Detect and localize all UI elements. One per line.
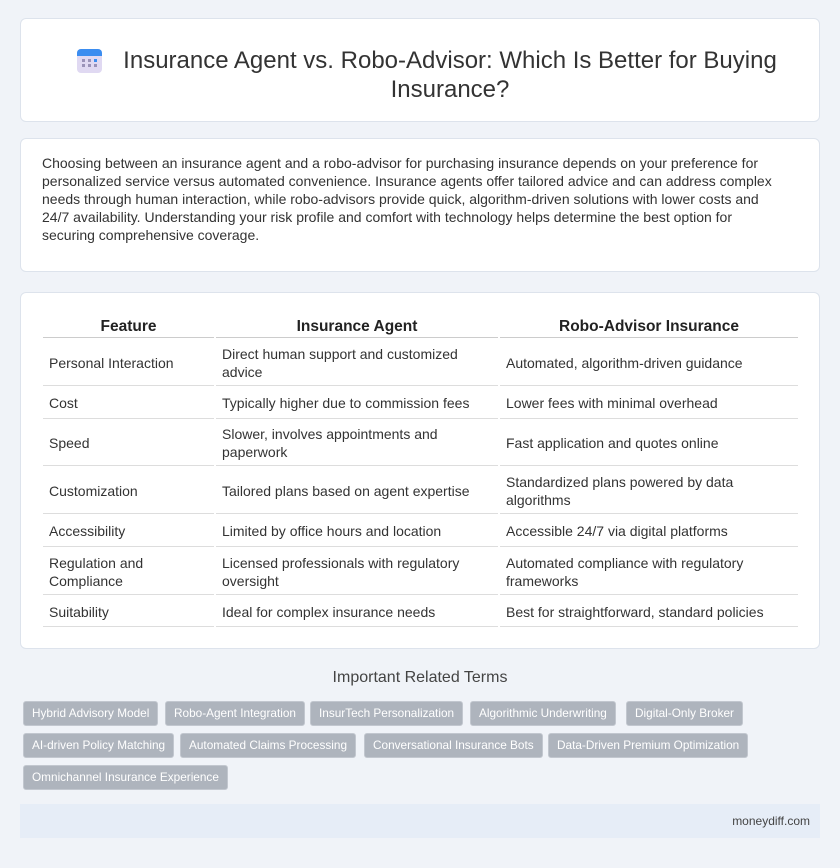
comparison table: Typically higher due to commission fees bbox=[222, 395, 469, 411]
footer: moneydiff.com bbox=[732, 814, 810, 828]
tags: Robo-Agent Integration bbox=[174, 706, 296, 720]
comparison table: Limited by office hours and location bbox=[222, 523, 441, 539]
tags: Hybrid Advisory Model bbox=[32, 706, 149, 720]
comparison table: Automated compliance with regulatory frameworks bbox=[506, 554, 743, 588]
comparison table: Best for straightforward, standard policies bbox=[506, 604, 764, 620]
comparison table: Customization bbox=[49, 482, 138, 498]
comparison table: Insurance Agent bbox=[297, 318, 417, 334]
tags: Digital-Only Broker bbox=[635, 706, 734, 720]
title: Insurance Agent vs. Robo-Advisor: Which Is Better for Buying Insurance? bbox=[123, 47, 777, 103]
comparison table: Ideal for complex insurance needs bbox=[222, 604, 435, 620]
intro text bbox=[20, 138, 820, 272]
comparison table: Lower fees with minimal overhead bbox=[506, 395, 718, 411]
tags: InsurTech Personalization bbox=[319, 706, 454, 720]
comparison table: Licensed professionals with regulatory oversight bbox=[222, 554, 459, 588]
comparison table: Cost bbox=[49, 395, 78, 411]
comparison table: Direct human support and customized advice bbox=[222, 346, 458, 380]
comparison table: Standardized plans powered by data algorithms bbox=[506, 474, 733, 508]
comparison table: Accessibility bbox=[49, 523, 125, 539]
tags: Omnichannel Insurance Experience bbox=[32, 770, 219, 784]
icon: calendar bbox=[77, 49, 102, 73]
comparison table: Feature bbox=[100, 318, 156, 334]
tags: Automated Claims Processing bbox=[189, 738, 347, 752]
comparison table: Suitability bbox=[49, 604, 109, 620]
comparison table: Regulation and Compliance bbox=[49, 554, 143, 588]
comparison table: Personal Interaction bbox=[49, 354, 174, 370]
comparison table bbox=[20, 292, 820, 649]
tags: Data-Driven Premium Optimization bbox=[557, 738, 739, 752]
comparison table: Accessible 24/7 via digital platforms bbox=[506, 523, 728, 539]
comparison table: Slower, involves appointments and paperwork bbox=[222, 426, 438, 460]
comparison table: Robo-Advisor Insurance bbox=[559, 318, 739, 334]
tags: AI-driven Policy Matching bbox=[32, 738, 165, 752]
related terms heading: Important Related Terms bbox=[333, 669, 507, 686]
comparison table: Automated, algorithm-driven guidance bbox=[506, 354, 743, 370]
comparison table: Tailored plans based on agent expertise bbox=[222, 482, 470, 498]
tags: Conversational Insurance Bots bbox=[373, 738, 534, 752]
comparison table: Fast application and quotes online bbox=[506, 435, 718, 451]
footer bbox=[20, 804, 820, 838]
comparison table: Speed bbox=[49, 435, 89, 451]
tags: Algorithmic Underwriting bbox=[479, 706, 607, 720]
header card bbox=[20, 18, 820, 122]
intro text: Choosing between an insurance agent and a robo-advisor for purchasing insurance depends on your preference for personalized service versus automated convenience. Insurance agents offer tailored advice and can address complex needs through human interaction, while robo-advisors provide quick, algorithm-driven solutions with lower costs and 24/7 availability. Understanding your risk profile and comfort with technology helps determine the best option for securing comprehensive coverage. bbox=[42, 155, 772, 243]
